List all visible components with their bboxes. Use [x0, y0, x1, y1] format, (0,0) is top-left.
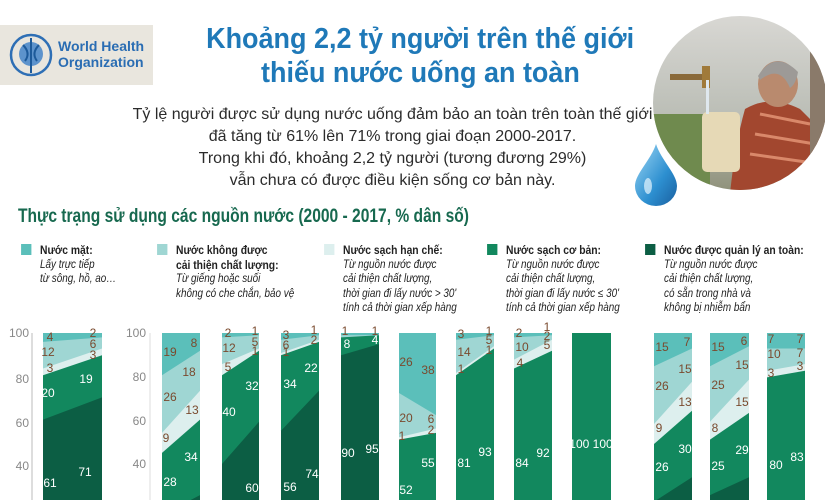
axis: left: 100 [126, 326, 146, 340]
bar group: bar 6: 2 [428, 423, 435, 437]
axis: left: 80 [16, 372, 29, 386]
bar group: bar 10: 7 [684, 335, 691, 349]
bar group: bar 7: 3 [458, 327, 465, 341]
bar group: bar 2: 9 [163, 431, 170, 445]
text block: intro paragraph [133, 106, 652, 189]
text block: intro paragraph: vẫn chưa có được điều kiện sống cơ bản này. [230, 172, 555, 189]
bar group: bar 8 [514, 320, 552, 500]
legend: unimproved: cải thiện chất lượng: [176, 258, 279, 272]
legend: surface water: từ sông, hồ, ao… [40, 273, 116, 285]
bar group: bar 3: 40 [222, 405, 236, 419]
bar group: bar 8: 84 [515, 456, 529, 470]
legend: basic: cải thiện chất lượng, [506, 273, 595, 285]
logo text [58, 38, 144, 70]
title: Khoảng 2,2 tỷ người trên thế giới [206, 23, 634, 55]
axis: left [9, 326, 150, 500]
bar group: bar 12: 83 [790, 450, 804, 464]
photo: woman at tap [653, 16, 825, 190]
bar group: bar 5: 90 [341, 446, 355, 460]
legend: limited: cải thiện chất lượng, [343, 273, 432, 285]
bar group: bar 11: 25 [711, 459, 725, 473]
bar group: bar 7: 1 [486, 343, 493, 357]
bar group: bar 4 [281, 323, 319, 500]
bar group: bar 6: 20 [399, 411, 413, 425]
text block: intro paragraph: Trong khi đó, khoảng 2,2 tỷ người (tương đương 29%) [199, 150, 586, 167]
bar group: bar 6: 55 [421, 456, 435, 470]
bar group: bar 12: 7 [797, 332, 804, 346]
bar group: bar 11: 15 [711, 340, 725, 354]
bar group: bar 1: 3 [47, 361, 54, 375]
bar group: bar 1: 19 [79, 372, 93, 386]
axis: left: 80 [133, 370, 146, 384]
bar group: bar 2: 13 [185, 403, 199, 417]
bar group: bar 8: 92 [536, 446, 550, 460]
bar group: bar 4: 22 [304, 361, 318, 375]
bar group: bar 7: 1 [458, 362, 465, 376]
logo text: Organization [58, 54, 144, 70]
bar group: bar 4: 1 [311, 323, 318, 337]
bar group: bar 8: 2 [516, 326, 523, 340]
legend: safely managed: Từ nguồn nước được [664, 258, 757, 270]
legend: basic [487, 243, 620, 314]
bar group: bar 1: 20 [41, 386, 55, 400]
logo text: World Health [58, 38, 144, 54]
legend: safely managed: Nước được quản lý an toàn: [664, 243, 804, 257]
bar group: bar 3: 2 [225, 326, 232, 340]
icon: water drop [635, 144, 677, 206]
bar group: bar 11 [710, 333, 749, 500]
bar group: bar 11: 29 [735, 443, 749, 457]
bar group: bar 3: 5 [225, 360, 232, 374]
bar group: bar 10: 15 [655, 340, 669, 354]
bar group: bar 1 [41, 326, 102, 500]
bar group: bar 1: 2 [90, 326, 97, 340]
legend: unimproved [157, 243, 294, 300]
bar group: bar 12: 7 [797, 346, 804, 360]
legend: limited: tính cả thời gian xếp hàng [343, 302, 457, 314]
legend: unimproved: không có che chắn, bảo vệ [176, 288, 294, 300]
bar group: bar 6: 26 [399, 355, 413, 369]
bar group: bar 4: 74 [305, 467, 319, 481]
bar group: bar 2: 26 [163, 390, 177, 404]
bar group: bar 12: 3 [797, 359, 804, 373]
bar group: bar 8: 1 [544, 320, 551, 334]
axis: left: 40 [133, 457, 146, 471]
legend: safely managed: không bị nhiễm bẩn [664, 302, 750, 314]
heading: chart subtitle: Thực trạng sử dụng các nguồn nước (2000 - 2017, % dân số) [18, 206, 469, 227]
bar group: bar 7: 14 [457, 345, 471, 359]
bar group: bar 5: 95 [365, 442, 379, 456]
bar group: bar 10: 13 [678, 395, 692, 409]
bar group: bar 7: 5 [486, 333, 493, 347]
legend: surface water [21, 243, 116, 285]
bar group: bar 1: 3 [90, 348, 97, 362]
bar group: bar 4: 3 [283, 328, 290, 342]
bar group: bar 9 [569, 333, 613, 500]
bar group: bar 2: 34 [184, 450, 198, 464]
legend: unimproved: Nước không được [176, 243, 268, 257]
bar group: bar 5 [341, 324, 379, 500]
bar group: bar 10: 15 [678, 362, 692, 376]
bar group: bar 5: 1 [372, 324, 379, 338]
bar group: bar 2: 18 [182, 365, 196, 379]
bar group: bar 4: 56 [283, 480, 297, 494]
bar group: bar 4: 1 [283, 345, 290, 359]
text block: intro paragraph: Tỷ lệ người được sử dụng nước uống đảm bảo an toàn trên toàn thế giới [133, 106, 652, 123]
bar group: bar 7: 1 [486, 324, 493, 338]
text block: intro paragraph: đã tăng từ 61% lên 71% trong giai đoạn 2000-2017. [209, 128, 576, 145]
bar group: bar 11: 15 [735, 358, 749, 372]
legend: surface water: Lấy trực tiếp [40, 258, 95, 270]
bar group: bar 11: 8 [712, 421, 719, 435]
bar group: bar 3: 32 [245, 379, 259, 393]
bar group: bar 7 [456, 324, 494, 500]
bar group: bar 8: 10 [515, 340, 529, 354]
bar group: bar 12: 3 [768, 366, 775, 380]
legend: basic: thời gian đi lấy nước ≤ 30' [506, 288, 619, 300]
bar group: bar 10 [654, 333, 692, 500]
bar group: bar 6: 38 [421, 363, 435, 377]
bar group: bar 3: 1 [252, 324, 259, 338]
title: thiếu nước uống an toàn [261, 57, 579, 89]
legend: basic: Từ nguồn nước được [506, 258, 599, 270]
bar group: bar 10: 9 [656, 421, 663, 435]
axis: left: 100 [9, 326, 29, 340]
bar group: bar 10: 26 [655, 379, 669, 393]
bar group: bar 8: 2 [544, 329, 551, 343]
bar group: bar 3 [222, 324, 259, 500]
bar group: bar 2: 19 [163, 345, 177, 359]
bar group: bar 1: 12 [41, 345, 55, 359]
axis: left: 40 [16, 459, 29, 473]
legend: limited: Từ nguồn nước được [343, 258, 436, 270]
bar group: bar 7: 81 [457, 456, 471, 470]
legend: unimproved: Từ giếng hoặc suối [176, 273, 260, 285]
bar group: bar 11: 15 [735, 395, 749, 409]
bar group: bar 12 [767, 332, 805, 500]
bar group: bar 6 [399, 333, 436, 500]
bar group: bar 10: 30 [678, 442, 692, 456]
bar group: bar 4: 2 [311, 333, 318, 347]
bar group: bar 7: 93 [478, 445, 492, 459]
bar group: bar 1: 61 [43, 476, 57, 490]
bar group: bar 2 [162, 333, 200, 500]
legend: basic: tính cả thời gian xếp hàng [506, 302, 620, 314]
bar group: bar 11: 25 [711, 378, 725, 392]
legend: limited [324, 243, 457, 314]
bar group: bar 4: 6 [283, 338, 290, 352]
bar group: bar 2: 28 [163, 475, 177, 489]
legend: safely managed: có sẵn trong nhà và [664, 288, 751, 300]
bar group: bar 12: 80 [769, 458, 783, 472]
bar group: bar 3: 12 [222, 341, 236, 355]
bar group: bar 5: 1 [342, 324, 349, 338]
title [206, 23, 634, 89]
legend: safely managed [645, 243, 804, 314]
bar group: bar 6: 52 [399, 483, 413, 497]
legend: safely managed: cải thiện chất lượng, [664, 273, 753, 285]
bar group: bar 8: 4 [517, 356, 524, 370]
bar group: bar 1: 71 [78, 465, 92, 479]
bar group: bar 1: 6 [90, 337, 97, 351]
bar group: bar 4: 34 [283, 377, 297, 391]
bar group: bar 8: 5 [544, 338, 551, 352]
legend: limited: Nước sạch hạn chế: [343, 243, 443, 257]
bar group: bar 6: 6 [428, 412, 435, 426]
logo: WHO [0, 25, 153, 85]
legend: surface water: Nước mặt: [40, 243, 93, 257]
bar group: bar 3: 60 [245, 481, 259, 495]
axis: left: 60 [16, 416, 29, 430]
legend: basic: Nước sạch cơ bản: [506, 243, 601, 257]
legend: limited: thời gian đi lấy nước > 30' [343, 288, 456, 300]
bar group: bar 11: 6 [741, 334, 748, 348]
bar group: bar 6: 1 [399, 429, 406, 443]
bar group: bar 5: 4 [372, 333, 379, 347]
bar group: bar 3: 5 [252, 335, 259, 349]
bar group: bar 12: 10 [767, 347, 781, 361]
icon: WHO emblem [10, 34, 52, 76]
bar group: bar 1: 4 [47, 330, 54, 344]
bar group: bar 12: 7 [768, 332, 775, 346]
axis: left: 60 [133, 414, 146, 428]
bar group: bar 3: 1 [252, 344, 259, 358]
bar group: bar 9: 100 100 [569, 437, 613, 451]
bar group: bar 10: 26 [655, 460, 669, 474]
bar group: bar 2: 8 [191, 336, 198, 350]
bar group: bar 5: 8 [344, 337, 351, 351]
